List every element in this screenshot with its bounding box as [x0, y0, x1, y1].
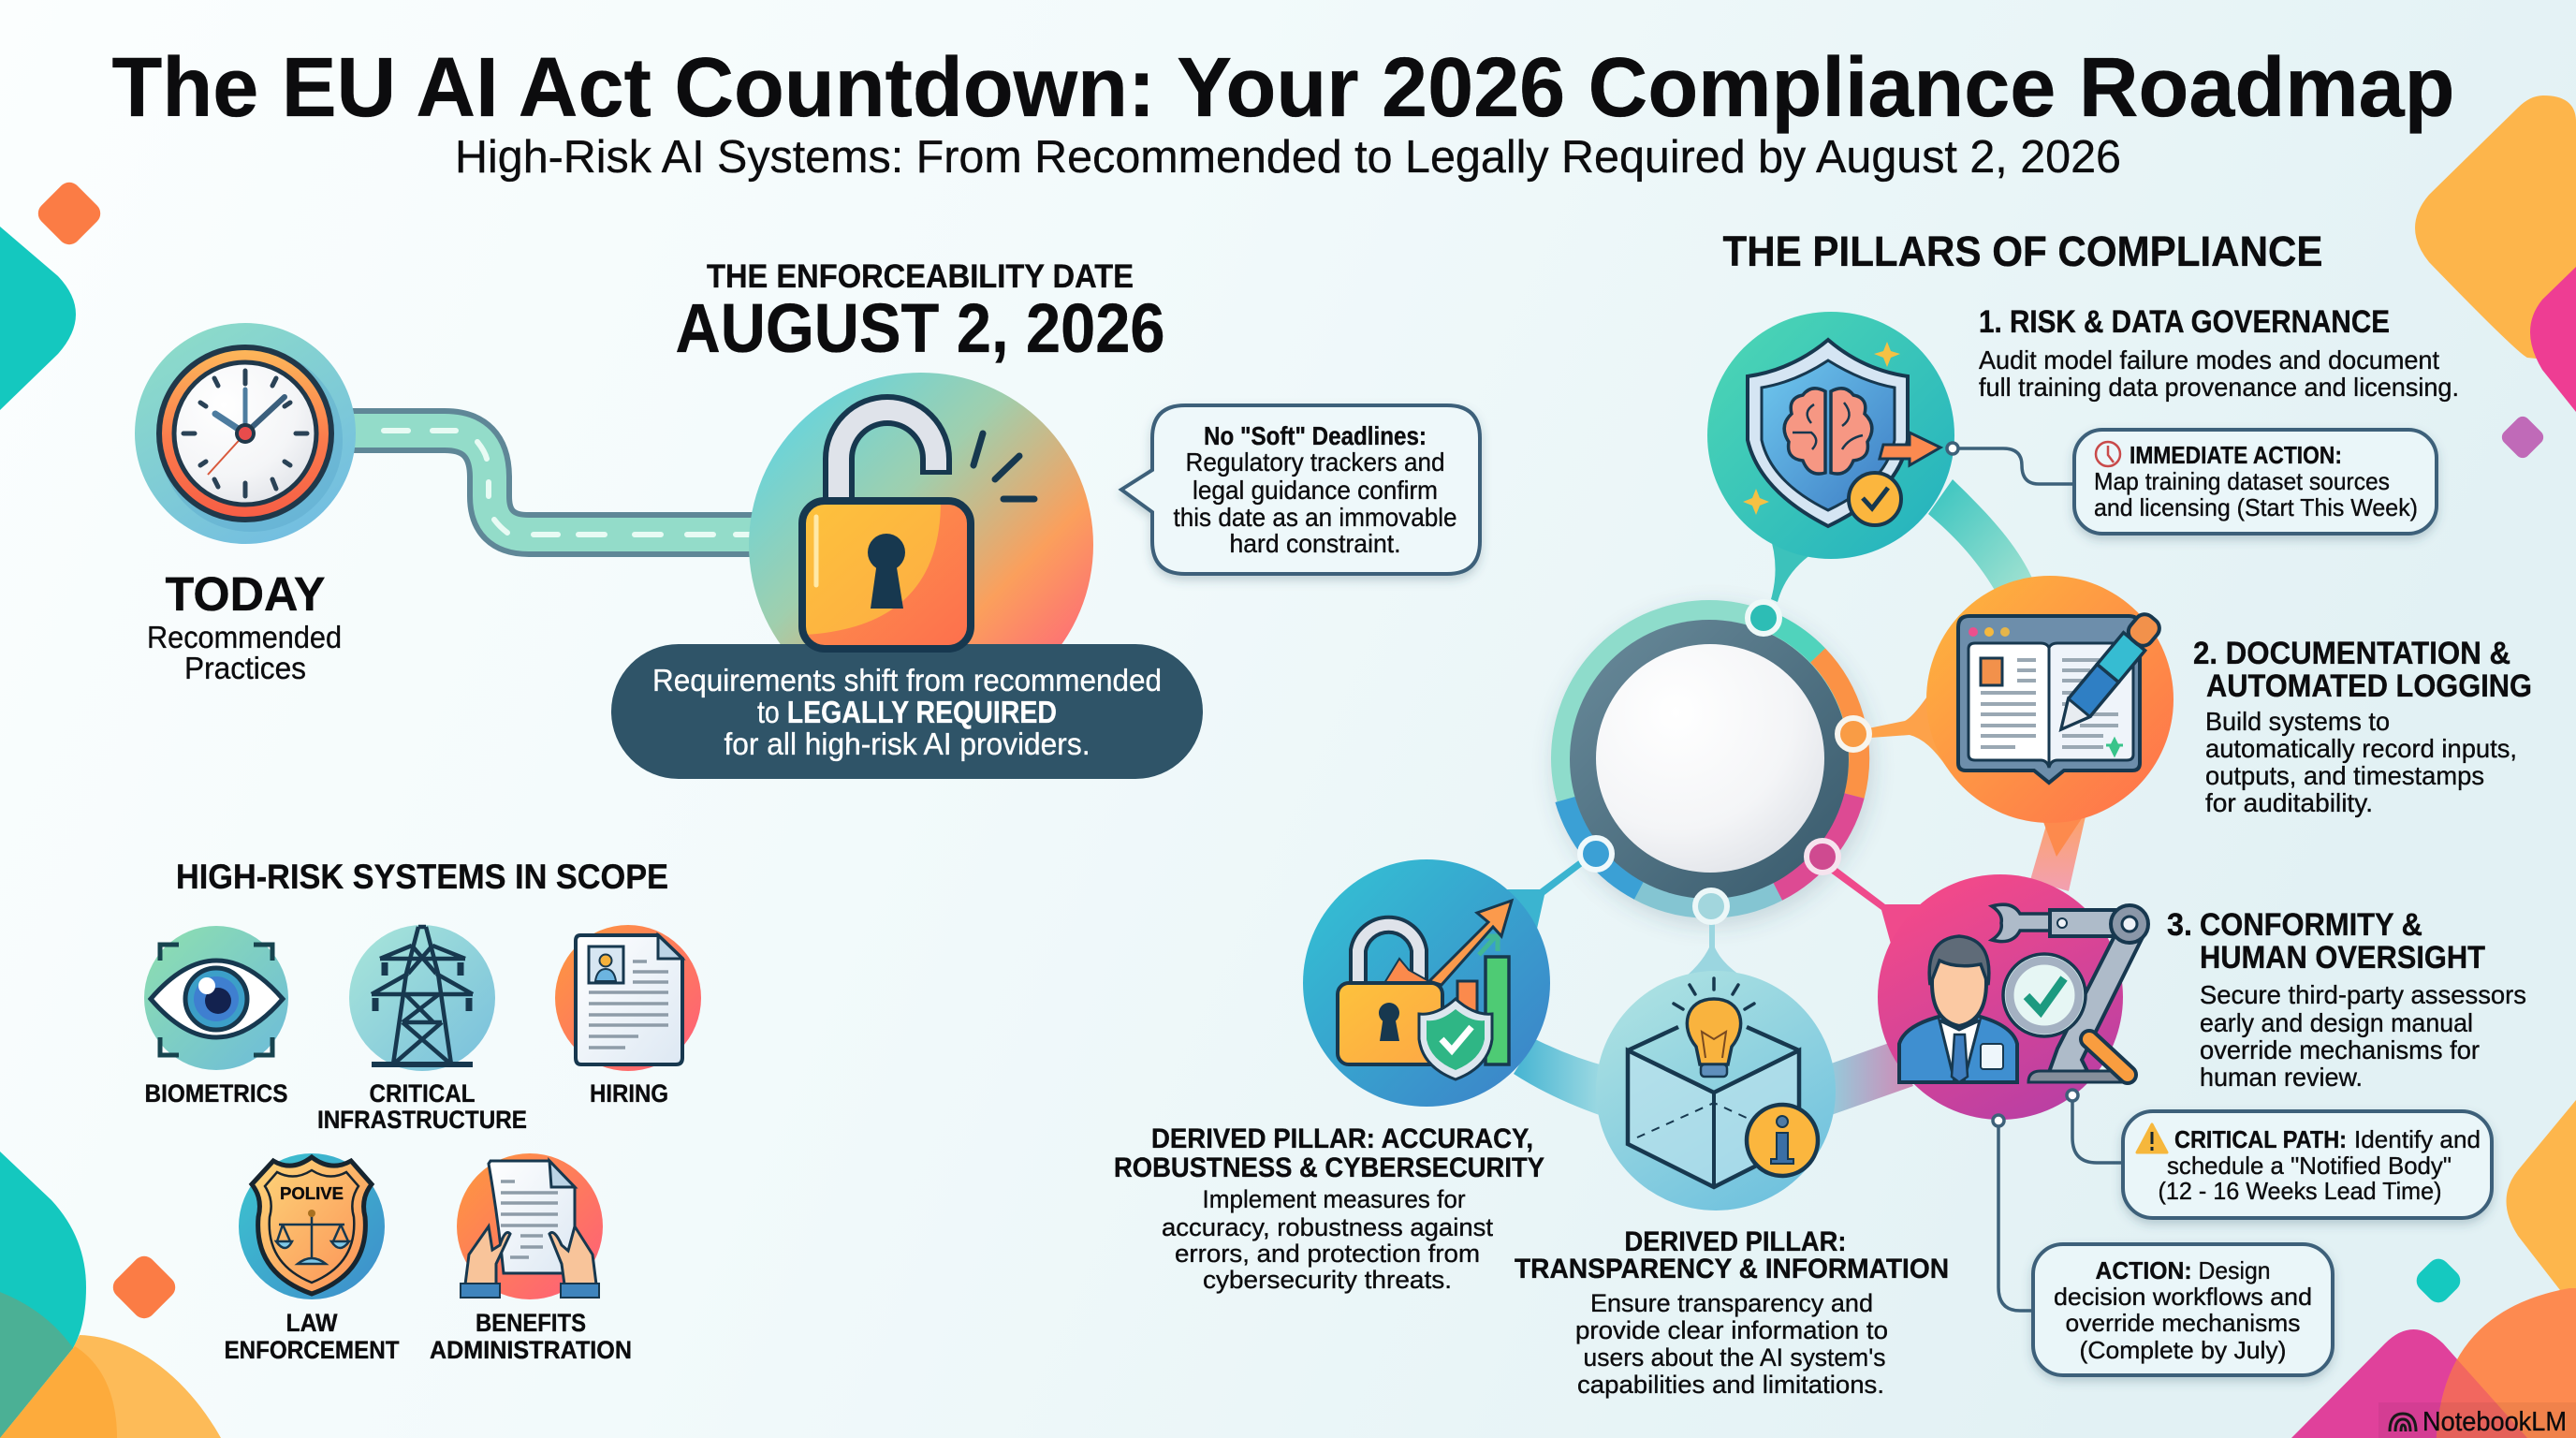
pillar 2 text: automatically record inputs,	[2205, 734, 2517, 763]
pillar 1 text: 1. RISK & DATA GOVERNANCE	[1979, 304, 2390, 340]
icon: hands holding document	[457, 1153, 603, 1299]
pillar 4 circle: accuracy	[1303, 857, 1588, 1107]
pillar 3 text	[2167, 907, 2526, 1092]
callout: no soft deadlines: this date as an immovable	[1174, 503, 1456, 532]
pillar 2 text: for auditability.	[2205, 788, 2373, 817]
callout: no soft deadlines: legal guidance confirm	[1193, 476, 1438, 505]
icon: biometrics	[144, 926, 288, 1070]
label: benefits administration	[430, 1309, 632, 1364]
derived pillar text: transparency: provide clear information to	[1575, 1316, 1888, 1344]
icon: police badge: POLIVE	[280, 1184, 344, 1203]
callout: critical path: Identify and	[2354, 1125, 2481, 1153]
today label: TODAY	[165, 567, 326, 621]
pillar 2 text: Build systems to	[2205, 707, 2390, 736]
derived pillar text: accuracy: cybersecurity threats.	[1203, 1266, 1452, 1294]
callout: action design: ACTION: Design	[2095, 1256, 2271, 1284]
derived pillar text: accuracy	[1114, 1123, 1544, 1294]
label: benefits administration: BENEFITS	[476, 1309, 586, 1337]
icon: transparent cube and bulb	[1628, 978, 1818, 1187]
pillar 1 circle	[1707, 312, 1954, 602]
padlock body	[802, 501, 971, 649]
icon: resume document	[555, 925, 701, 1071]
icon: transmission tower	[349, 925, 495, 1071]
pillar 3 text: CONFORMITY &	[2200, 907, 2422, 943]
callout: action design: decision workflows and	[2054, 1283, 2312, 1311]
callout: critical path: (12 - 16 Weeks Lead Time)	[2159, 1177, 2441, 1205]
heading: pillars of compliance: THE PILLARS OF COMPLIANCE	[1722, 227, 2323, 275]
today label: Practices	[184, 651, 306, 685]
icon: open book and pen	[1958, 609, 2164, 783]
pillar 3 text: 3.	[2167, 907, 2192, 943]
callout: critical path: schedule a "Notified Body"	[2167, 1152, 2452, 1180]
ribbons connecting pillars	[1514, 479, 2086, 1119]
callout: no soft deadlines: No "Soft" Deadlines:	[1204, 421, 1427, 450]
icon: red clock	[2096, 442, 2120, 466]
enforcement statement pill: to LEGALLY REQUIRED	[757, 695, 1057, 729]
hub connector nodes	[1580, 602, 1869, 922]
pillar 3 text: HUMAN OVERSIGHT	[2200, 940, 2485, 976]
enforceability date heading: AUGUST 2, 2026	[676, 289, 1164, 367]
icon: shield with brain	[1743, 340, 1940, 526]
callout: no soft deadlines	[1121, 405, 1480, 574]
pillar 1 text: full training data provenance and licensing.	[1979, 373, 2459, 402]
icon: assessor, magnifier and robotic arm	[1899, 904, 2148, 1082]
icon: police badge	[239, 1153, 385, 1299]
derived pillar text: accuracy: ROBUSTNESS & CYBERSECURITY	[1114, 1152, 1544, 1183]
derived pillar text: transparency: users about the AI system's	[1584, 1343, 1885, 1372]
callout: immediate action	[2074, 430, 2437, 534]
enforceability date heading: THE ENFORCEABILITY DATE	[707, 258, 1134, 295]
callout: no soft deadlines: Regulatory trackers and	[1185, 448, 1445, 477]
watermark: NotebookLM: NotebookLM	[2422, 1407, 2567, 1437]
pillar 3 text: Secure third-party assessors	[2200, 980, 2526, 1009]
watermark: NotebookLM	[2378, 1402, 2576, 1438]
road from today to the enforceability date	[346, 431, 763, 535]
callout: critical path: CRITICAL PATH:	[2174, 1125, 2347, 1153]
label: law enforcement: LAW	[286, 1309, 338, 1337]
derived pillar text: accuracy: Implement measures for	[1202, 1185, 1466, 1213]
derived pillar text: accuracy: DERIVED PILLAR: ACCURACY,	[1151, 1123, 1533, 1154]
connector to immediate action	[1947, 443, 2075, 484]
pillar 3 text: human review.	[2200, 1063, 2363, 1092]
callout: immediate action: IMMEDIATE ACTION:	[2130, 441, 2342, 469]
label: law enforcement: ENFORCEMENT	[225, 1336, 400, 1364]
pillar 3 text: override mechanisms for	[2200, 1035, 2480, 1064]
derived pillar text: transparency	[1515, 1226, 1949, 1399]
label: law enforcement	[225, 1309, 400, 1364]
today label	[147, 567, 342, 685]
enforcement statement pill	[611, 644, 1203, 779]
derived pillar text: transparency: DERIVED PILLAR:	[1625, 1226, 1846, 1257]
callout: immediate action: and licensing (Start This Week)	[2094, 493, 2418, 521]
label: critical infrastructure	[317, 1079, 527, 1134]
subtitle: High-Risk AI Systems: From Recommended to Legally Required by August 2, 2026	[455, 132, 2121, 183]
centre hub ring	[1561, 610, 1859, 908]
pillar 2 text: 2. DOCUMENTATION &	[2193, 636, 2510, 671]
pillar 1 text: Audit model failure modes and document	[1979, 345, 2439, 374]
pillar 2 text: outputs, and timestamps	[2205, 761, 2484, 790]
pillar 3 text: early and design manual	[2200, 1008, 2473, 1037]
callout: immediate action: Map training dataset sources	[2094, 467, 2390, 495]
derived pillar text: transparency: capabilities and limitations.	[1577, 1371, 1884, 1399]
callout: action design: (Complete by July)	[2080, 1336, 2286, 1364]
title: The EU AI Act Countdown: Your 2026 Compliance Roadmap	[112, 41, 2454, 135]
enforceability date heading	[676, 258, 1164, 367]
label: critical infrastructure: INFRASTRUCTURE	[317, 1106, 527, 1134]
heading: high-risk systems: HIGH-RISK SYSTEMS IN SCOPE	[176, 858, 668, 896]
label: benefits administration: ADMINISTRATION	[430, 1336, 632, 1364]
pillar 2 circle	[1868, 576, 2174, 857]
label: hiring: HIRING	[590, 1079, 668, 1108]
derived pillar text: accuracy: accuracy, robustness against	[1162, 1213, 1493, 1241]
pillar 3 circle	[1822, 860, 2148, 1120]
pillar 2 text: AUTOMATED LOGGING	[2206, 668, 2532, 704]
callout: no soft deadlines: hard constraint.	[1230, 529, 1400, 558]
callout: critical path	[2123, 1111, 2492, 1218]
callout: action design: override mechanisms	[2065, 1309, 2301, 1337]
icon: clock	[135, 323, 356, 544]
pillar 1 text	[1979, 304, 2459, 402]
derived pillar text: transparency: Ensure transparency and	[1590, 1289, 1873, 1317]
icon: lock, shield and growth chart	[1338, 901, 1512, 1079]
label: biometrics: BIOMETRICS	[144, 1079, 288, 1108]
enforcement statement pill: Requirements shift from recommended	[652, 663, 1162, 697]
connectors to pillar 3 actions	[1993, 1090, 2123, 1311]
label: critical infrastructure: CRITICAL	[369, 1079, 476, 1108]
icon: warning triangle	[2137, 1124, 2167, 1152]
callout: action design	[2033, 1244, 2333, 1375]
enforcement statement pill: for all high-risk AI providers.	[724, 726, 1090, 761]
derived pillar text: accuracy: errors, and protection from	[1175, 1240, 1480, 1268]
icon: open padlock	[749, 373, 1093, 717]
pillar 2 text	[2193, 636, 2532, 817]
today label: Recommended	[147, 620, 342, 654]
pillar 5 circle: transparency	[1596, 922, 1836, 1211]
derived pillar text: transparency: TRANSPARENCY & INFORMATION	[1515, 1254, 1949, 1284]
